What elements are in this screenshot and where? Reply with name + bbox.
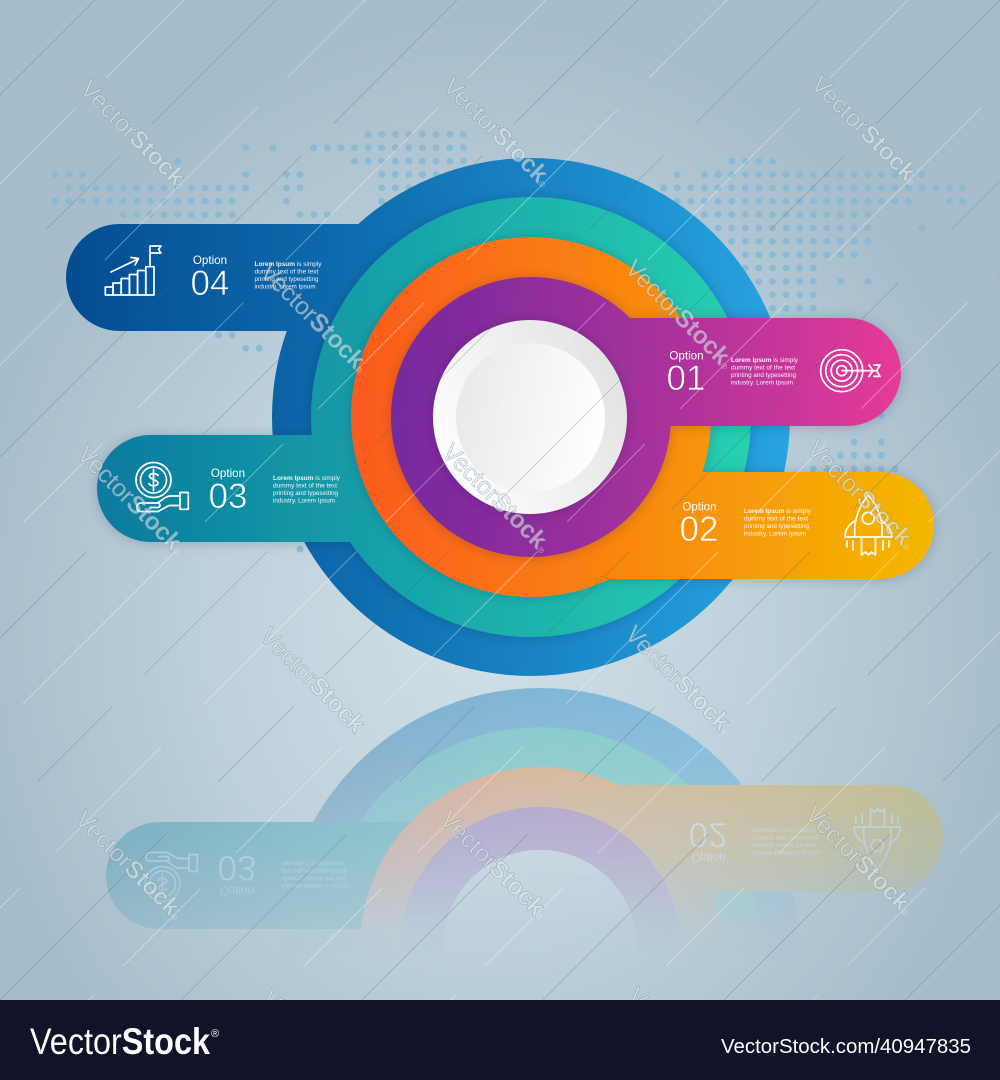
text block: option 02: dummy text of the text [744, 516, 808, 522]
watermarks: VectorStock® [72, 441, 191, 561]
ring and tab: option 04 blue [66, 158, 790, 676]
number: 04: 04 [191, 264, 229, 303]
watermarks: VectorStock® [800, 801, 919, 921]
text block: option 01: dummy text of the text [731, 364, 795, 372]
number: 02: 02 [680, 510, 718, 549]
panel content: option 03 [136, 462, 341, 516]
watermarks: VectorStock® [620, 255, 739, 375]
panel content: option 02 [680, 495, 892, 555]
reflected content: option 02 [689, 809, 901, 869]
number: 01: 01 [667, 359, 705, 398]
text block: option 04: industry. Lorem Ipsum [254, 284, 316, 290]
text block: option 04: Lorem Ipsum is simply [254, 261, 321, 268]
text block: option 03: Lorem Ipsum is simply [273, 475, 339, 482]
label: option 01: Option [669, 350, 704, 362]
text block: option 01: industry. Lorem Ipsum [731, 380, 793, 386]
number: 03: 03 [209, 477, 247, 516]
label: option 03: Option [211, 467, 245, 480]
watermarks: VectorStock® [70, 806, 189, 926]
text block: option 02: Lorem Ipsum is simply [744, 508, 810, 515]
watermarks: Ve [622, 983, 661, 1022]
label: option 02: Option [682, 500, 717, 514]
reflected rings and tabs [106, 688, 943, 926]
watermarks: VectorStock® [438, 73, 557, 193]
text block: option 03: printing and typesetting [273, 490, 338, 497]
ring and tab: option 03 teal [97, 197, 751, 637]
text block: option 03: industry. Lorem Ipsum [273, 498, 335, 504]
ring and tab: option 01 purple [391, 277, 901, 557]
watermarks: VectorStock® [620, 621, 739, 741]
floor reflection of the infographic [106, 688, 943, 926]
watermarks: VectorStock® [806, 71, 925, 191]
watermarks: VectorStock® [75, 76, 194, 196]
panel content: option 04 [105, 246, 322, 303]
watermarks: VectorStock® [437, 439, 556, 559]
watermarks: VectorStock® [802, 436, 921, 556]
icon: hand holding dollar coin [136, 462, 188, 512]
label: option 04: Option [193, 254, 227, 267]
footer registered mark: ® [211, 1028, 219, 1040]
dotted world map: left part [55, 134, 463, 549]
text block: option 03: dummy text of the text [273, 482, 337, 490]
footer bar [0, 1000, 1000, 1080]
infographic: concentric rings with option tabs [66, 158, 934, 676]
watermarks: VectorStock® [435, 806, 554, 926]
panel content: option 01 [667, 350, 880, 398]
watermarks: VectorStock® [255, 623, 374, 743]
icon: target with arrow [821, 350, 880, 392]
text block: option 01: Lorem Ipsum is simply [731, 357, 797, 364]
text block: option 04: dummy text of the text [254, 268, 319, 276]
text block: option 02: printing and typesetting [744, 523, 809, 530]
icon: growth chart with flag [105, 246, 161, 295]
footer image id: VectorStock.com/40947835 [721, 1036, 971, 1058]
ring and tab: option 02 orange [351, 237, 934, 597]
watermarks: Ve [256, 985, 295, 1024]
text block: option 01: printing and typesetting [731, 372, 796, 379]
icon: rocket [845, 495, 892, 555]
reflected content: option 03 [145, 848, 350, 902]
footer logo: VectorStock [30, 1021, 210, 1062]
dotted world map: right part [664, 161, 963, 469]
watermarks: VectorStock® [255, 259, 374, 379]
reflected tab base: option 03 [106, 822, 410, 929]
text block: option 02: industry. Lorem Ipsum [744, 530, 806, 538]
centre white disc [433, 320, 627, 514]
text block: option 04: printing and typesetting [254, 276, 319, 283]
